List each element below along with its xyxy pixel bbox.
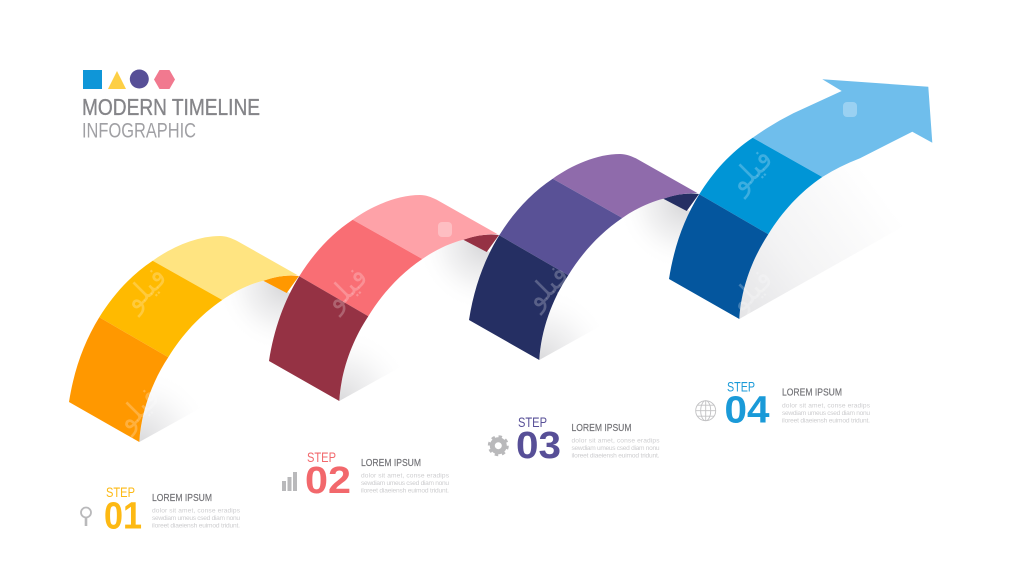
band base (69, 317, 168, 442)
heading: LOREM IPSUM (782, 386, 842, 398)
icon: blue square (83, 70, 102, 89)
arch: step 2 (269, 195, 505, 401)
watermarks (107, 102, 857, 438)
body text: iloreet diaeiensh euimod tridunt. (782, 418, 870, 424)
step number: 04 (724, 390, 770, 432)
body text (361, 472, 450, 494)
body text: dolor sit amet, conse eradips (152, 508, 241, 514)
body text: sewdiam umeus csed diam nonu (152, 515, 240, 522)
watermarks: فیلو (720, 262, 779, 320)
heading: LOREM IPSUM (152, 492, 212, 504)
arch underside (663, 194, 699, 211)
step number: 03 (516, 425, 561, 467)
body text (152, 508, 241, 530)
arch side shading (139, 281, 305, 442)
icon: yellow triangle (108, 71, 126, 89)
arch: step 3 (469, 154, 705, 360)
step 3 label (489, 415, 660, 467)
arch: step 1 (69, 236, 305, 442)
arch side shading (739, 132, 920, 319)
body text: iloreet diaeiensh euimod tridunt. (152, 522, 240, 530)
heading: LOREM IPSUM (361, 457, 421, 469)
step word: STEP (727, 380, 755, 394)
band middle (299, 220, 422, 316)
body text: iloreet diaeiensh euimod tridunt. (572, 452, 660, 460)
step word: STEP (106, 485, 135, 500)
watermarks: فیلو (516, 258, 575, 316)
body text: sewdiam umeus csed diam nonu (572, 445, 660, 452)
title: MODERN TIMELINE (82, 94, 260, 120)
icon: gear (489, 436, 508, 455)
arch underside (463, 235, 499, 252)
watermarks: فیلو (107, 380, 166, 438)
arch side shading (539, 199, 705, 360)
watermarks: فیلو (114, 260, 173, 318)
step 1 label (81, 485, 241, 537)
band top (353, 195, 497, 259)
watermarks: فیلو (720, 142, 779, 200)
subtitle: INFOGRAPHIC (82, 118, 196, 142)
watermark: logo on arrow (843, 102, 857, 117)
band top (153, 236, 297, 300)
band middle (99, 261, 222, 357)
arrow: step 4 (669, 79, 932, 319)
body text: dolor sit amet, conse eradips (361, 472, 450, 480)
band base (669, 194, 768, 319)
icon: magnifier (81, 508, 91, 526)
body text (782, 402, 871, 424)
band middle (699, 138, 822, 234)
step number: 01 (104, 495, 142, 537)
step 2 label (282, 450, 450, 502)
body text (572, 438, 660, 460)
body text: iloreet diaeiensh euimod tridunt. (361, 488, 449, 494)
legend shapes (83, 70, 175, 89)
arrow head and shaft (753, 79, 932, 177)
step number: 02 (305, 460, 351, 502)
icon: purple circle (130, 70, 149, 88)
step 4 label (696, 380, 871, 432)
body text: sewdiam umeus csed diam nonu (361, 480, 449, 487)
icon: bar chart (282, 472, 297, 491)
step word: STEP (307, 450, 336, 465)
watermark: logo on pink band (438, 222, 452, 237)
arch underside (263, 276, 299, 293)
band base (269, 276, 368, 401)
band middle (499, 179, 622, 275)
band top (553, 154, 697, 218)
icon: globe (696, 401, 716, 421)
body text: dolor sit amet, conse eradips (782, 402, 871, 410)
arch side shading (339, 240, 505, 401)
body text: dolor sit amet, conse eradips (572, 438, 660, 444)
band base (469, 235, 568, 360)
body text: sewdiam umeus csed diam nonu (782, 410, 870, 417)
heading: LOREM IPSUM (572, 422, 632, 434)
step word: STEP (518, 415, 547, 430)
icon: pink hexagon (154, 70, 175, 89)
watermarks: فیلو (315, 260, 374, 318)
